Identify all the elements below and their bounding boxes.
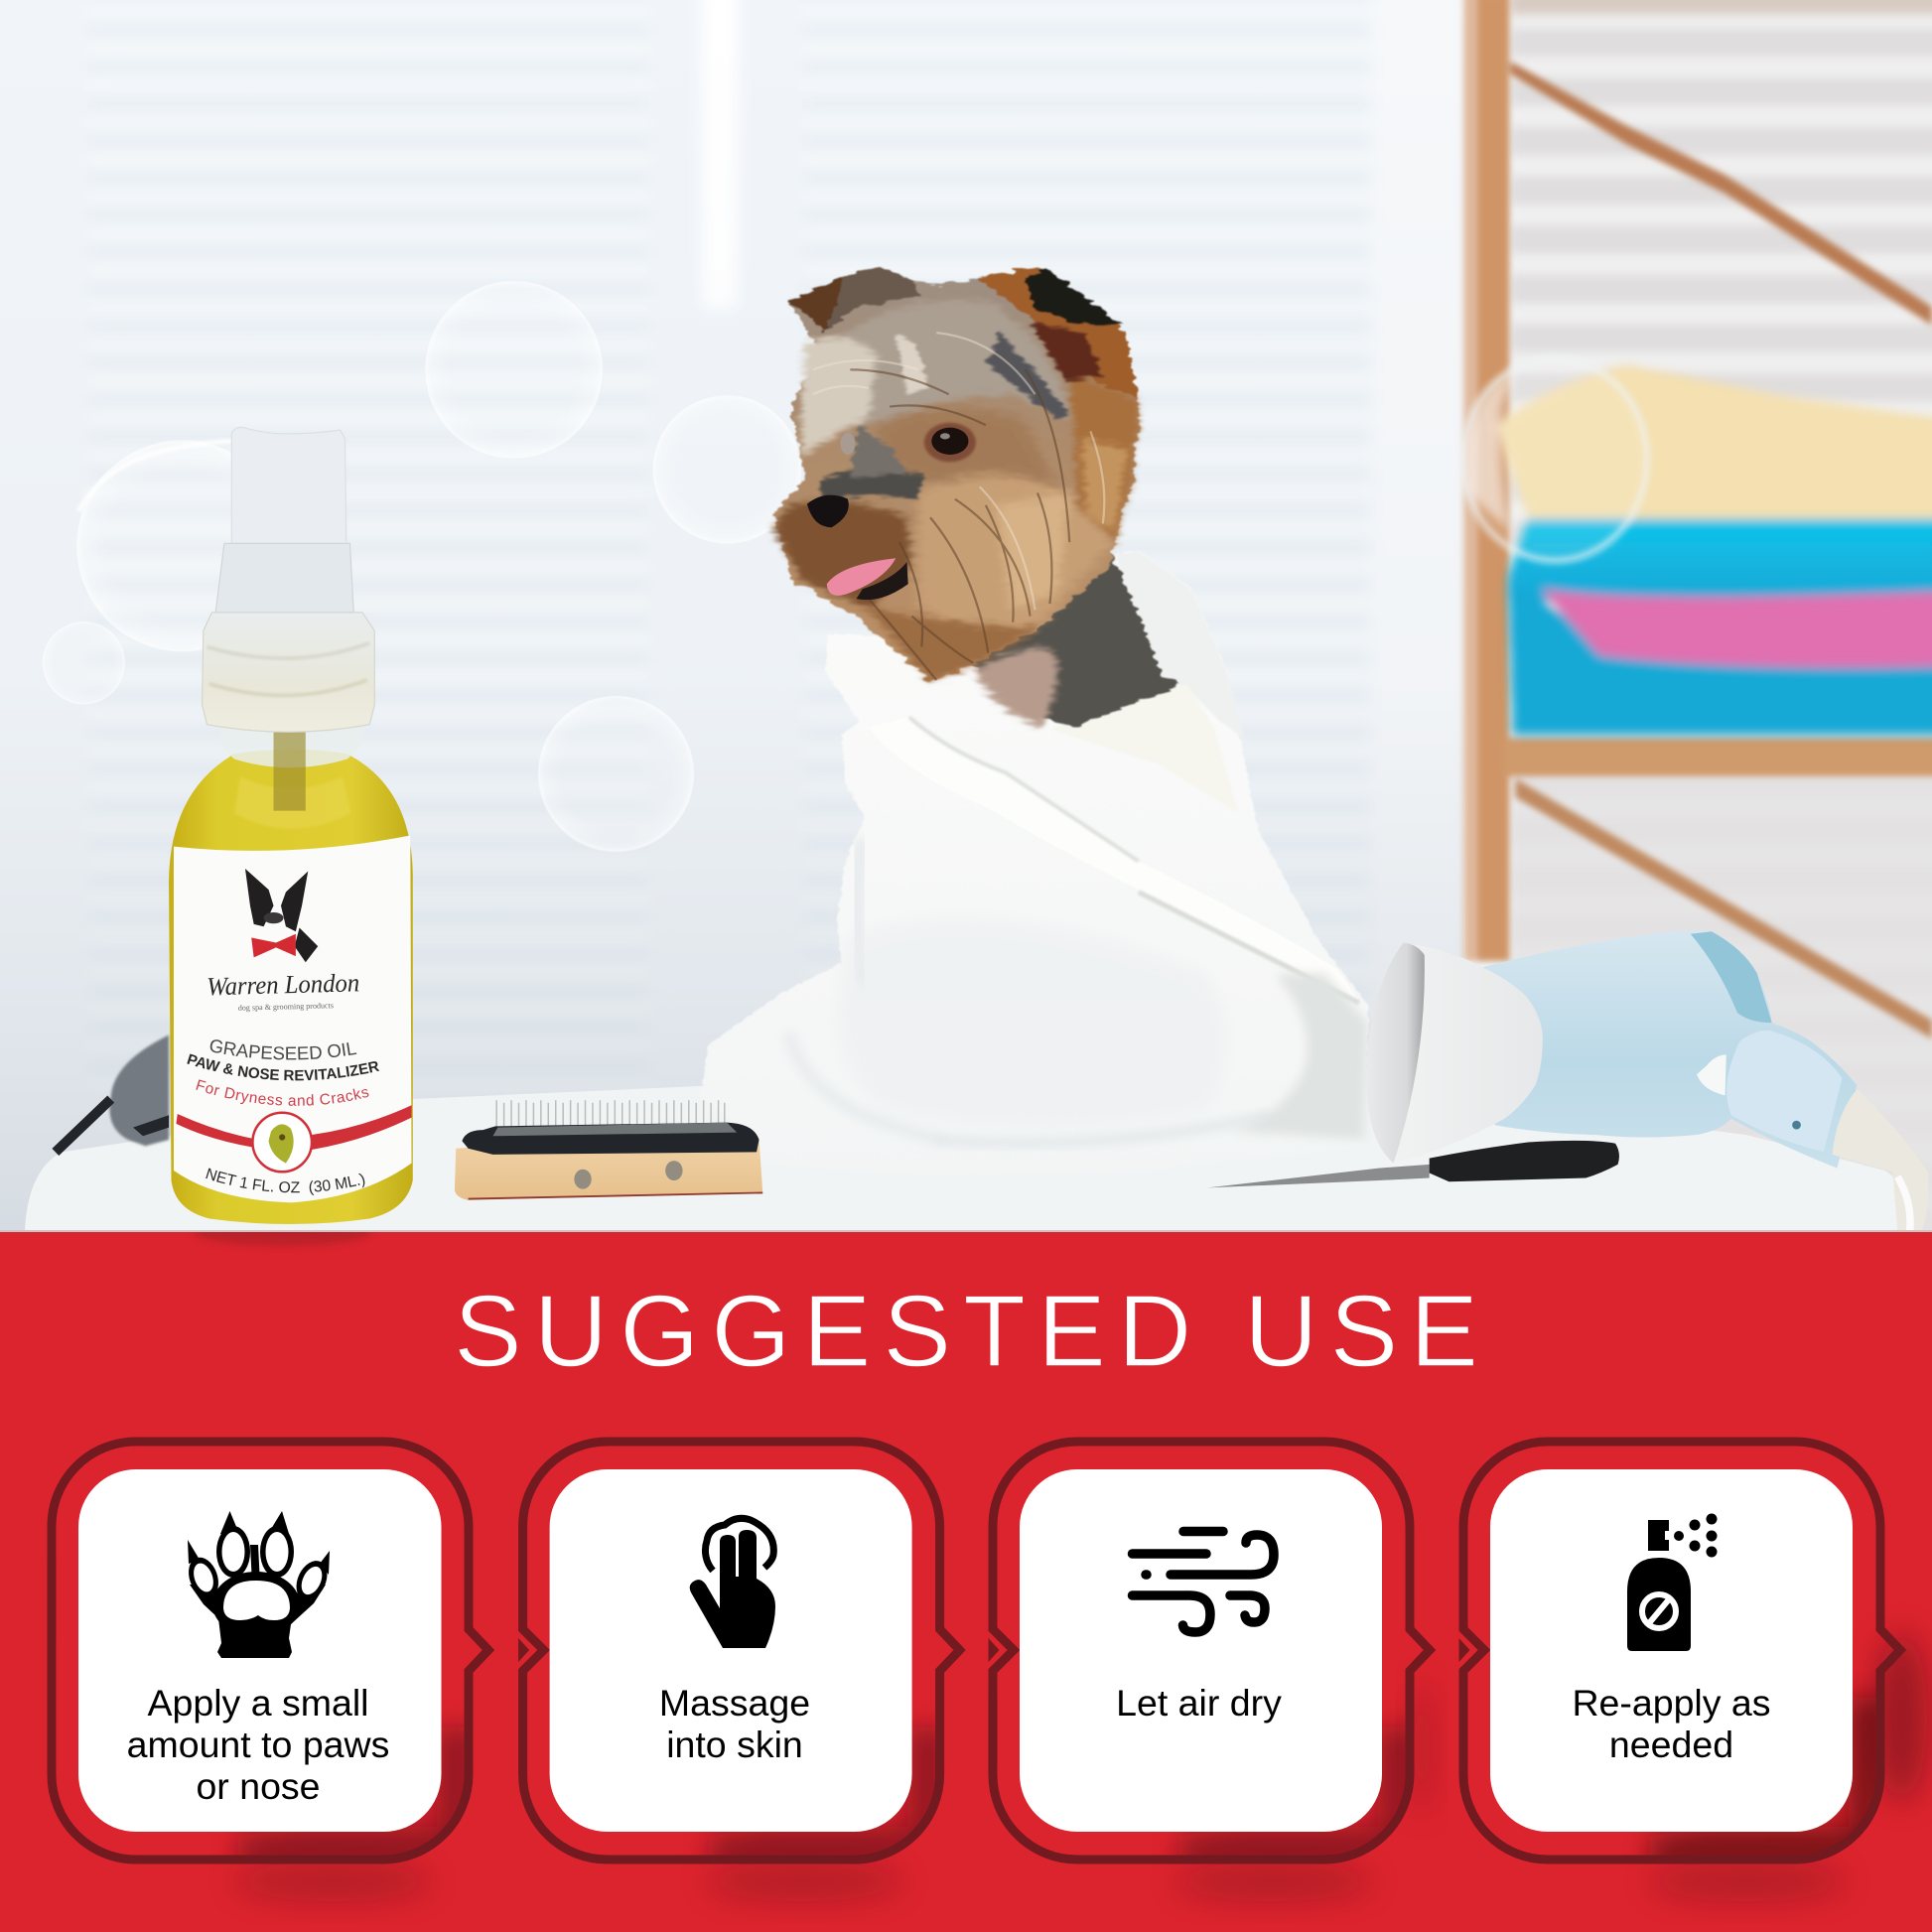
dog nose — [807, 495, 849, 527]
step card 1 — [52, 1442, 488, 1901]
icon: paw — [184, 1511, 334, 1658]
background: window shutters — [0, 0, 1932, 1245]
card 1 text: or nose — [196, 1765, 321, 1807]
label product text: GRAPESEED OIL — [210, 1039, 357, 1060]
dog cheek — [918, 475, 1115, 647]
label net weight: NET 1 FL. OZ (30 ML.) — [206, 1168, 365, 1195]
hair dryer — [1366, 930, 1928, 1231]
dryer vent panel — [1691, 931, 1772, 1023]
bottle spray cap — [231, 427, 346, 543]
card 2 text: Massage — [659, 1682, 810, 1724]
card 1 text: amount to paws — [127, 1724, 389, 1765]
card 2 panel — [550, 1469, 912, 1832]
red panel — [0, 1232, 1932, 1932]
table — [25, 1084, 1917, 1233]
card 3 shadow — [1174, 1678, 1434, 1901]
slicker brush — [455, 1100, 762, 1200]
bubbles — [42, 280, 1647, 853]
bottle label — [174, 835, 412, 1202]
clipper and cable — [56, 1035, 169, 1152]
towel body shading — [1232, 973, 1368, 1140]
dog muzzle — [773, 501, 911, 610]
product bottle — [169, 427, 413, 1224]
dryer body — [1482, 930, 1857, 1169]
label red stripe and grape — [176, 1105, 412, 1172]
heading: SUGGESTED USE — [454, 1274, 1478, 1388]
dog head — [773, 266, 1140, 681]
step card 2 — [518, 1442, 960, 1901]
dog grey band — [986, 333, 1069, 419]
card 1 frame — [52, 1442, 488, 1860]
dog forehead — [801, 300, 1072, 425]
label brand text: Warren London — [207, 968, 360, 1001]
card 1 text: Apply a small — [147, 1682, 369, 1724]
label product text: PAW & NOSE REVITALIZER — [187, 1054, 379, 1080]
card 2 text: into skin — [666, 1724, 803, 1765]
card 4 text — [1572, 1682, 1771, 1765]
card 3 frame — [989, 1442, 1430, 1860]
dryer nozzle opening — [1366, 942, 1425, 1164]
yorkie dog — [773, 266, 1180, 727]
towel back fold — [1116, 551, 1245, 740]
dog neck — [970, 553, 1180, 727]
card 4 panel — [1490, 1469, 1853, 1832]
card 4 text: needed — [1609, 1724, 1733, 1765]
scissors — [1207, 1141, 1619, 1187]
icon: spray bottle — [1627, 1513, 1718, 1651]
card 1 shadow — [233, 1727, 477, 1901]
dog lower jaw fur — [863, 604, 1041, 681]
dryer tip and cord — [1833, 1089, 1928, 1231]
dog tongue — [827, 558, 896, 596]
icon: two-finger hand massage — [690, 1518, 775, 1648]
dog fur strands — [850, 369, 1069, 680]
bottle collar — [203, 613, 374, 732]
towel collar hem — [1049, 684, 1238, 813]
towel wrap — [700, 551, 1369, 1174]
card 2 shadow — [705, 1727, 948, 1901]
label product text — [187, 1039, 379, 1106]
step card 4 — [1459, 1442, 1927, 1901]
dog left ear — [788, 266, 920, 332]
label logo dog — [245, 869, 318, 962]
dryer nozzle — [1394, 942, 1543, 1164]
dryer handle highlight — [1726, 1031, 1842, 1152]
label brand text: dog spa & grooming products — [238, 1001, 334, 1013]
card 3 text: Let air dry — [1116, 1682, 1282, 1724]
card 2 text — [659, 1682, 810, 1765]
bottle neck — [220, 720, 367, 767]
label product text: For Dryness and Cracks — [196, 1079, 369, 1106]
card 4 text: Re-apply as — [1572, 1682, 1771, 1724]
icon: wind — [1132, 1531, 1274, 1632]
card 4 frame — [1459, 1442, 1900, 1860]
dog mouth — [857, 562, 908, 600]
dog eyes — [840, 423, 976, 462]
card 4 shadow — [1648, 1633, 1927, 1901]
bottle cap tier — [215, 543, 353, 613]
wooden rack — [1463, 0, 1932, 1038]
card 1 panel — [78, 1469, 441, 1832]
step card 3 — [989, 1442, 1434, 1901]
bottle oil body — [169, 750, 413, 1224]
card 3 panel — [1020, 1469, 1382, 1832]
photo bottom hairline — [0, 1230, 1932, 1232]
card 1 text — [127, 1682, 389, 1807]
dryer nub — [1697, 1054, 1726, 1095]
dog right ear — [976, 266, 1140, 400]
card 2 frame — [518, 1442, 960, 1860]
bottle shadow on panel — [193, 1232, 373, 1249]
photo: grooming scene — [0, 0, 1932, 1230]
folded towels — [1496, 364, 1932, 735]
dog right mane — [1069, 369, 1140, 540]
